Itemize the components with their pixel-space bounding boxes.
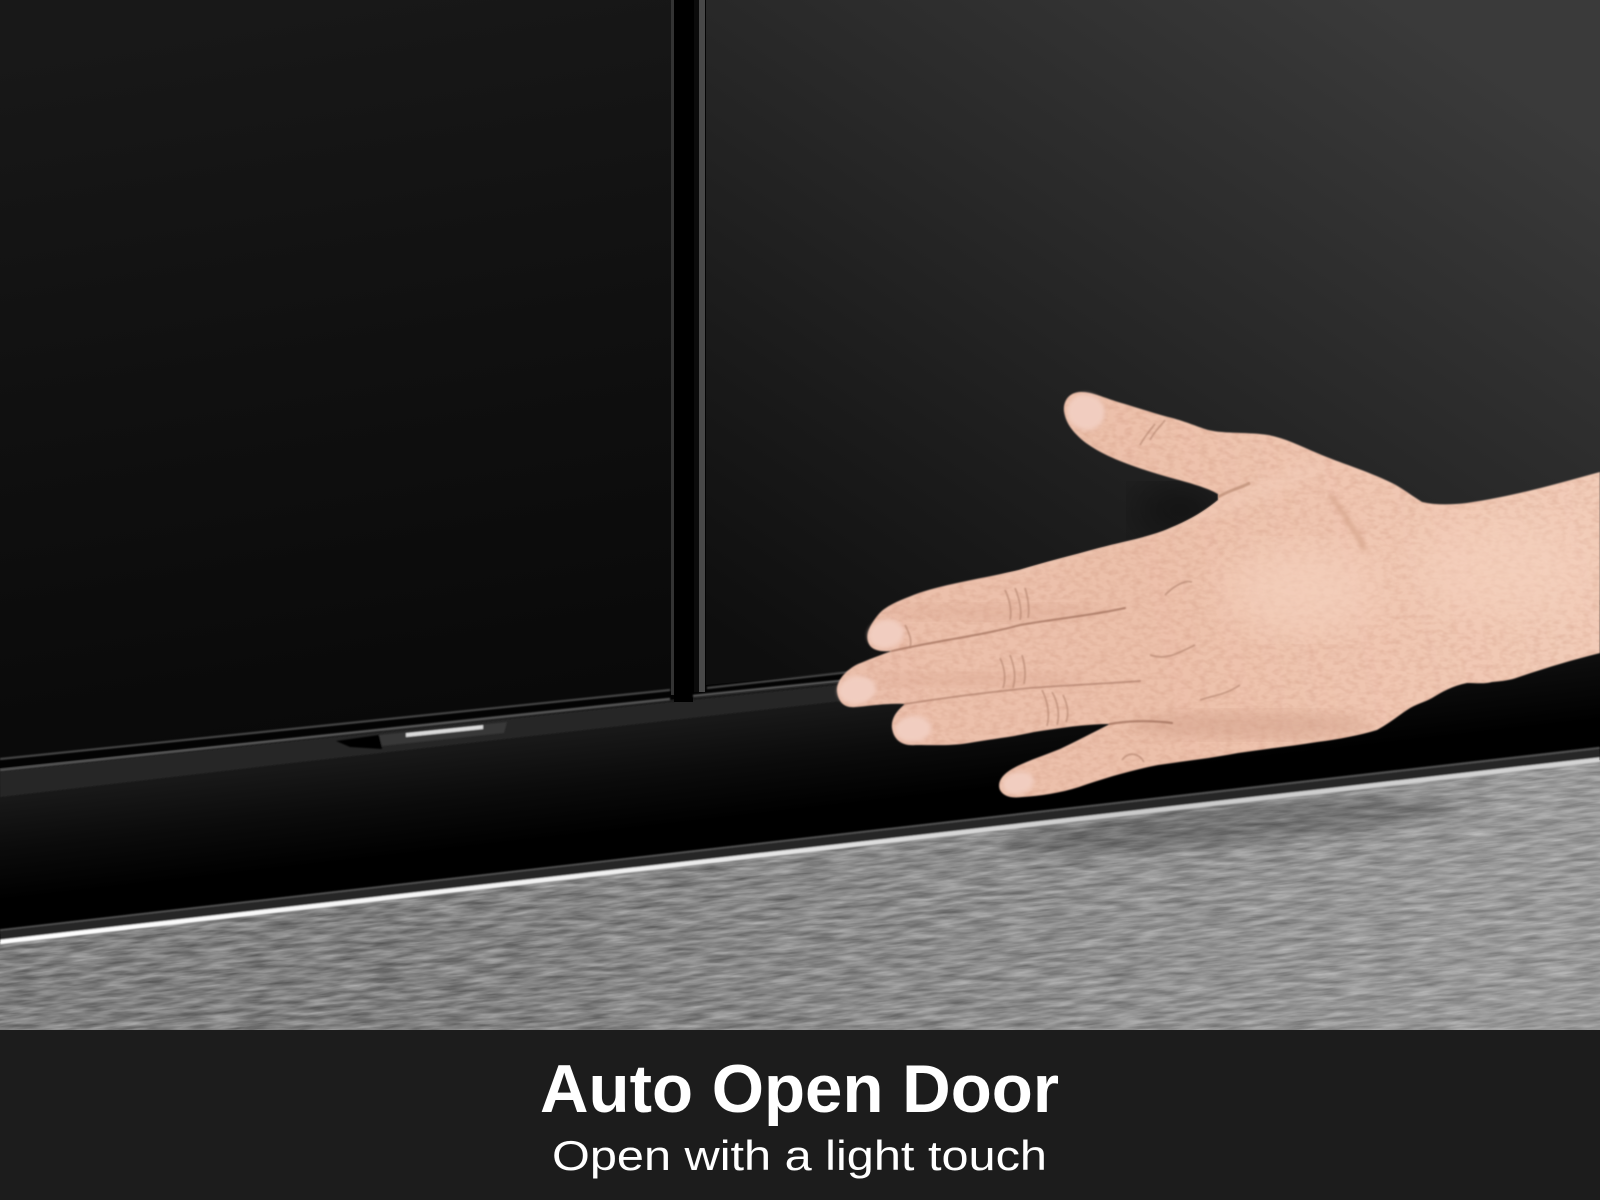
lower base below doors — [0, 605, 1600, 942]
finger separation creases — [892, 608, 1172, 724]
left refrigerator door — [0, 0, 671, 760]
knuckle creases — [905, 420, 1240, 762]
hand — [830, 380, 1600, 810]
right refrigerator door — [706, 0, 1600, 685]
counter edge trim — [0, 748, 1600, 942]
shadow of thumb on door — [1135, 486, 1225, 534]
hand shading — [847, 402, 1600, 796]
grey band under doors — [0, 684, 850, 797]
fingernails — [836, 388, 1111, 798]
door handle recess — [336, 722, 507, 749]
caption panel — [0, 1030, 1600, 1200]
brushed stainless counter — [0, 760, 1600, 1030]
hand shadow on steel — [1002, 792, 1459, 858]
center door gap — [671, 0, 705, 700]
door bottom trim lines — [0, 672, 850, 770]
subtitle: Open with a light touch — [552, 1132, 1047, 1179]
handle highlight — [406, 725, 483, 737]
title: Auto Open Door — [540, 1051, 1059, 1127]
